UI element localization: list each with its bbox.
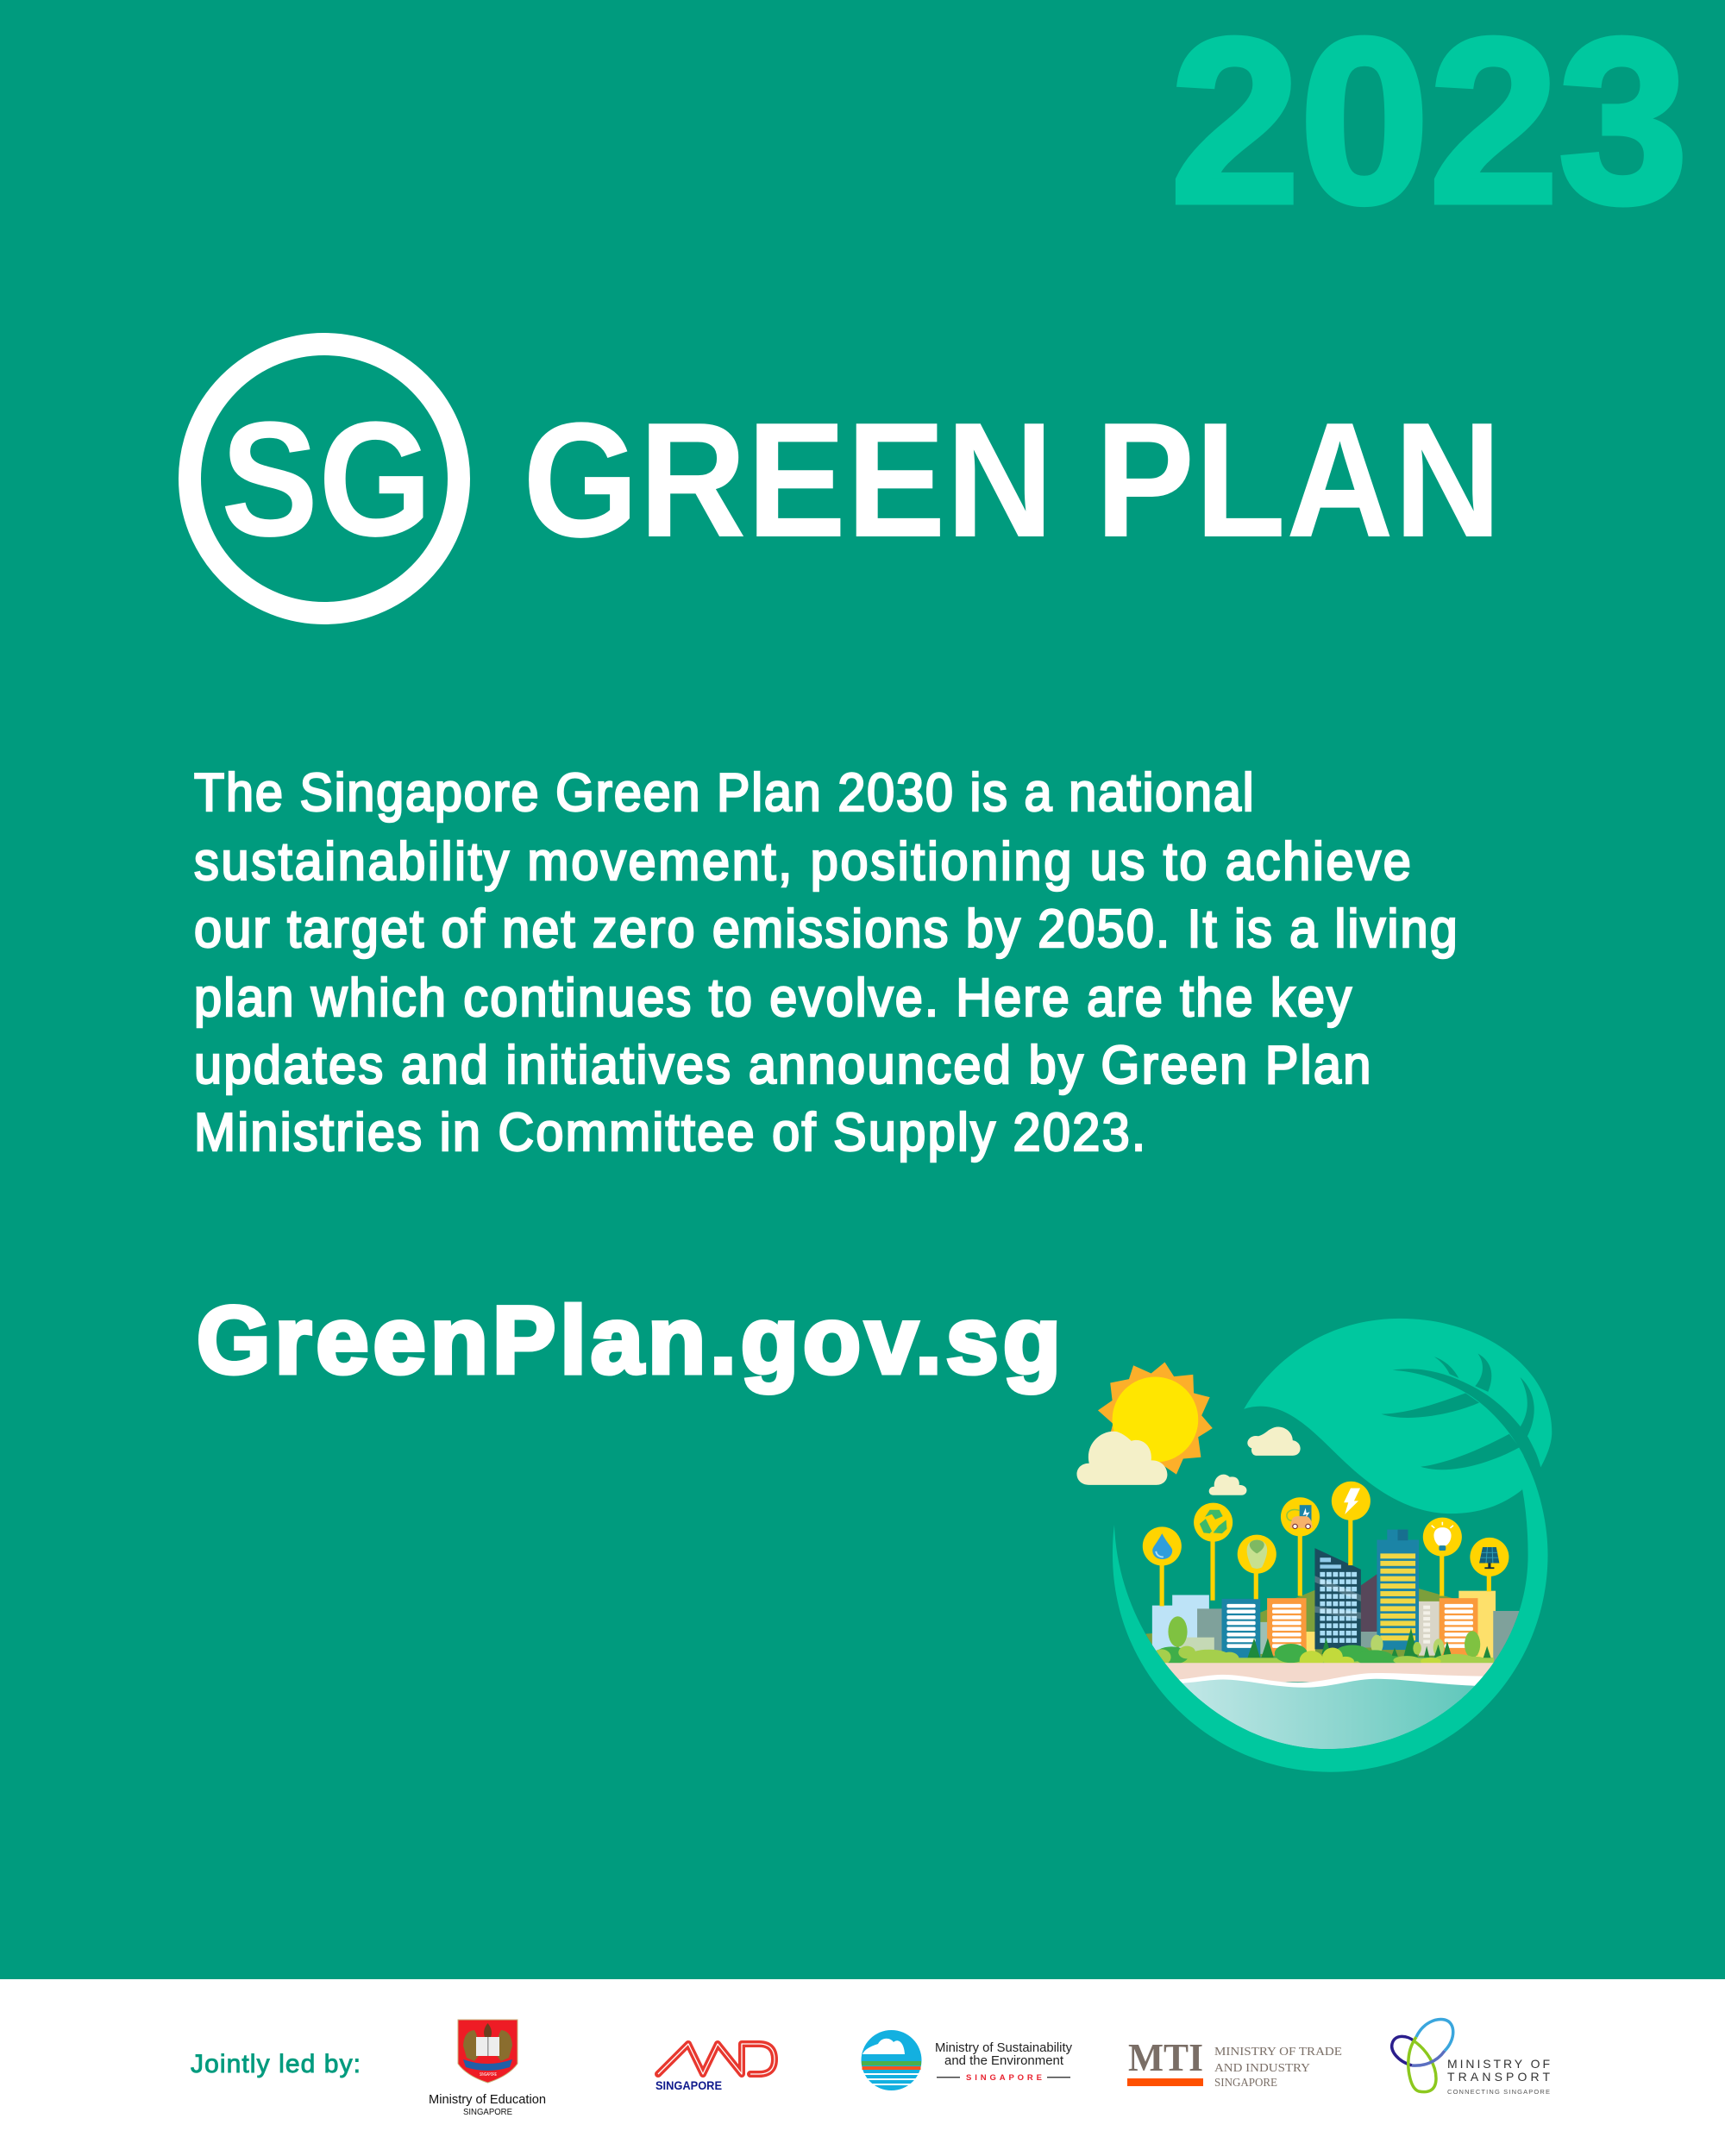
website link: GreenPlan.gov.sg	[197, 1288, 1061, 1394]
cloud medium	[1247, 1427, 1301, 1456]
logo: Ministry of Transport: MINISTRY OF	[1447, 2057, 1550, 2071]
intro paragraph: updates and initiatives announced by Green Plan	[194, 1035, 1371, 1094]
logo: Ministry of Transport	[1392, 2020, 1550, 2096]
icon: light bulb	[1432, 1522, 1453, 1551]
icon: electric car	[1287, 1505, 1313, 1529]
city scene	[1134, 1530, 1521, 1756]
logo: Ministry of Sustainability and the Environment: SINGAPORE	[966, 2073, 1042, 2083]
logo: Ministry of Education: SINGAPORE	[463, 2108, 512, 2117]
icon: water drop	[1152, 1533, 1172, 1559]
logo: Ministry of Transport: CONNECTING SINGAPORE	[1447, 2088, 1550, 2096]
logo: Ministry of Sustainability and the Environment	[861, 2030, 1073, 2090]
footer	[0, 1979, 1725, 2156]
intro paragraph: Ministries in Committee of Supply 2023.	[194, 1102, 1145, 1162]
icon: cabbage	[1247, 1539, 1267, 1569]
logo: MND: SINGAPORE	[656, 2078, 722, 2092]
intro paragraph	[194, 762, 1458, 1162]
cloud large	[1076, 1432, 1167, 1485]
logo: MTI: AND INDUSTRY	[1214, 2062, 1310, 2075]
logo: Ministry of Education: Ministry of Education	[429, 2093, 546, 2107]
leaf and ring	[1113, 1319, 1552, 1772]
icon: lightning bolt	[1344, 1489, 1360, 1514]
sun	[1098, 1363, 1213, 1475]
intro paragraph: our target of net zero emissions by 2050. It is a living	[194, 899, 1458, 958]
logo ring with SG	[190, 344, 459, 613]
logo: Ministry of Education	[429, 2020, 546, 2117]
logo: MTI: SINGAPORE	[1214, 2077, 1277, 2090]
logo: MTI: MTI	[1128, 2035, 1203, 2079]
intro paragraph: sustainability movement, positioning us to achieve	[194, 831, 1411, 891]
icon: recycle	[1200, 1510, 1226, 1533]
illustration: leaf and city globe	[1076, 1319, 1552, 1772]
logo: Ministry of Education: SINGAPORE	[480, 2072, 497, 2078]
intro paragraph: plan which continues to evolve. Here are the key	[194, 968, 1352, 1027]
leaf veins	[1382, 1354, 1543, 1485]
logo: Ministry of Transport: TRANSPORT	[1447, 2070, 1550, 2084]
logo: MTI	[1127, 2035, 1342, 2090]
icon: solar panel	[1479, 1547, 1499, 1569]
logo: SG Green Plan	[190, 344, 1502, 613]
logo ring with SG: SG	[221, 388, 432, 571]
energy and sustainability pins	[1143, 1482, 1509, 1606]
logo: Ministry of Sustainability and the Environment: Ministry of Sustainability	[935, 2041, 1073, 2055]
wordmark: GREEN PLAN	[523, 389, 1502, 572]
intro paragraph: The Singapore Green Plan 2030 is a national	[194, 762, 1254, 822]
logo: Ministry of Sustainability and the Environment: and the Environment	[944, 2054, 1063, 2068]
logo: MND	[656, 2044, 775, 2092]
jointly led by label: Jointly led by:	[191, 2050, 361, 2078]
cloud small	[1209, 1475, 1246, 1495]
logo: MTI: MINISTRY OF TRADE	[1214, 2046, 1342, 2059]
